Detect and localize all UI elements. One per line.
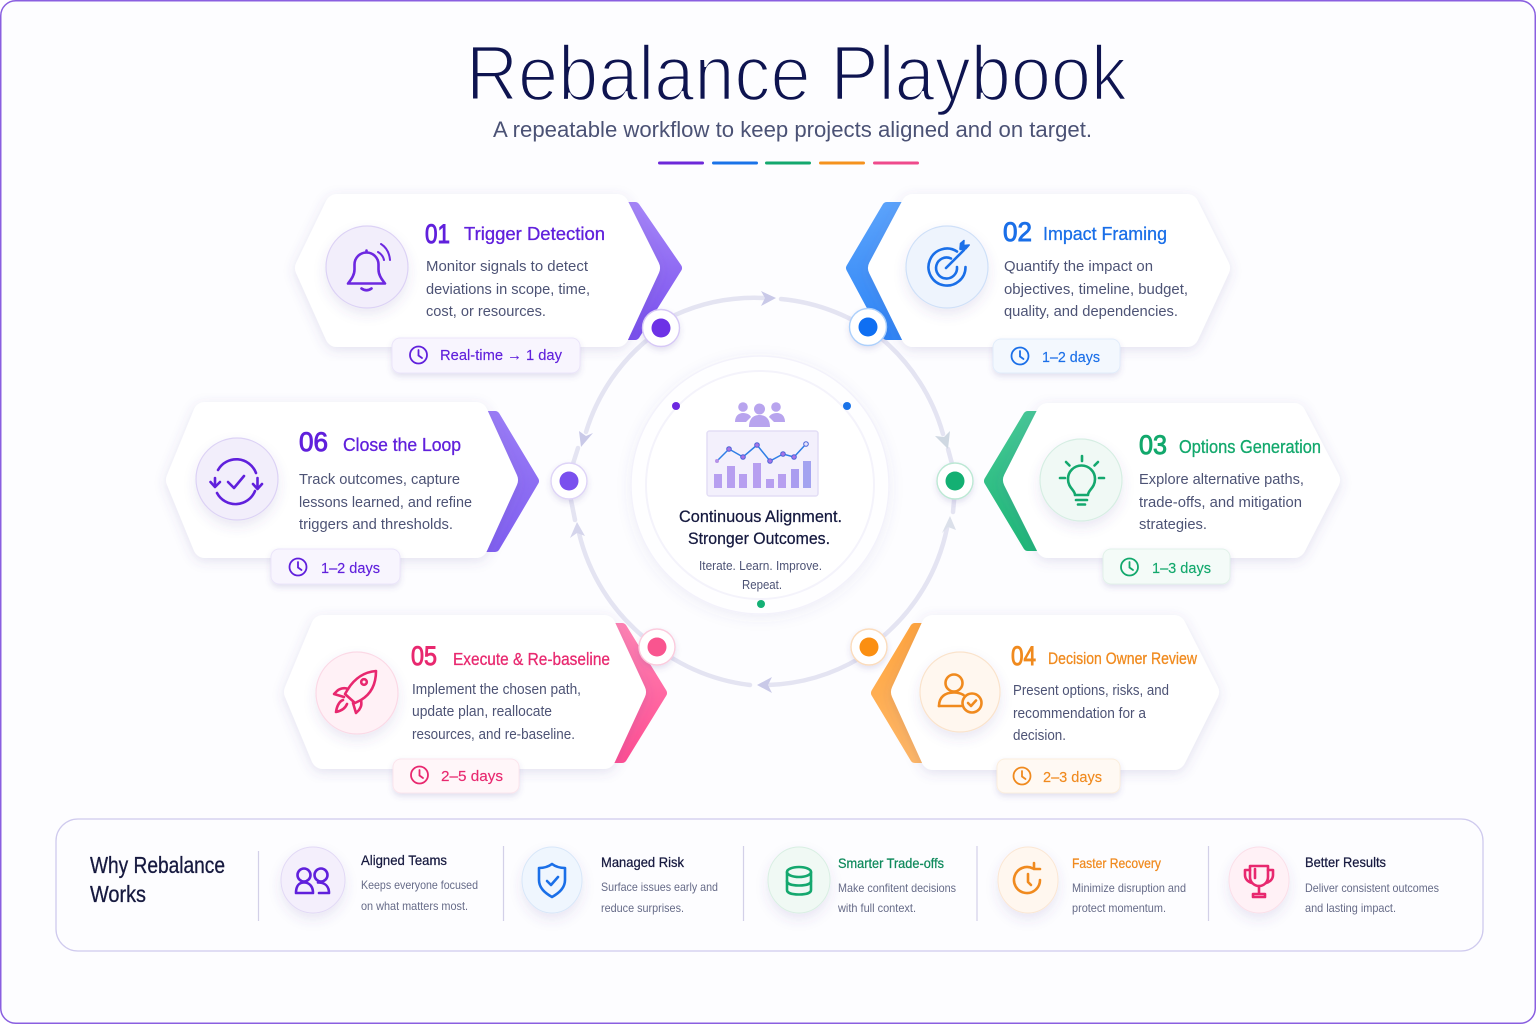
icon: loop check [196, 438, 278, 520]
description: lessons learned, and refine [299, 494, 472, 511]
benefit: managed risk: Surface issues early and [601, 880, 718, 894]
duration badge: 1–2 days [321, 560, 380, 577]
heading: 01 [425, 219, 450, 249]
chevron [876, 628, 935, 758]
description: Explore alternative paths, [1139, 471, 1304, 488]
card [1015, 415, 1328, 546]
heading: Close the Loop [343, 434, 461, 455]
panel heading: Why Rebalance [90, 852, 225, 878]
node markers [551, 308, 973, 665]
icon: light bulb [1040, 439, 1122, 521]
benefit: faster recovery: Faster Recovery [1072, 855, 1161, 871]
benefit: managed risk: reduce surprises. [601, 901, 684, 915]
description [299, 471, 472, 533]
duration badge [993, 339, 1120, 373]
card [903, 627, 1207, 758]
hub dots [672, 402, 851, 608]
benefit: better results: Better Results [1305, 854, 1386, 870]
card [880, 206, 1218, 335]
heading [425, 219, 605, 249]
description: Track outcomes, capture [299, 471, 460, 488]
panel: why rebalance works [56, 819, 1483, 951]
panel heading: Works [90, 881, 146, 907]
heading: Execute & Re-baseline [453, 649, 610, 669]
panel: step 02 [851, 206, 1218, 373]
heading [411, 641, 610, 671]
duration badge [271, 549, 400, 584]
description [426, 258, 590, 320]
heading: Decision Owner Review [1048, 649, 1198, 668]
panel: step 03 [989, 415, 1328, 584]
hub caption: Repeat. [742, 577, 782, 592]
benefit: smarter trade-offs: with full context. [837, 901, 916, 915]
description: quality, and dependencies. [1004, 303, 1178, 320]
heading [299, 427, 461, 457]
description: cost, or resources. [426, 303, 546, 320]
panel: step 06 [178, 414, 534, 584]
benefit: managed risk [522, 847, 718, 915]
heading: 04 [1011, 641, 1036, 671]
chevron [472, 416, 534, 547]
icon: person with check [920, 652, 1000, 732]
description: Monitor signals to detect [426, 258, 589, 275]
chart: dashboard [707, 431, 818, 496]
duration badge [393, 759, 519, 793]
description: Implement the chosen path, [412, 681, 581, 698]
heading: Options Generation [1179, 436, 1321, 457]
title: Rebalance Playbook [466, 29, 1128, 117]
chevron [600, 628, 662, 758]
cycle ring with arrows [569, 291, 956, 693]
benefit: managed risk: Managed Risk [601, 854, 685, 870]
benefit: aligned teams: Aligned Teams [361, 852, 447, 868]
panel heading [90, 852, 225, 907]
description: recommendation for a [1013, 705, 1147, 722]
heading: 05 [411, 641, 437, 671]
heading: 06 [299, 427, 328, 457]
colour accent bars [658, 162, 919, 164]
duration badge [1103, 549, 1230, 584]
benefit: better results: Deliver consistent outcomes [1305, 881, 1439, 895]
hub caption [699, 558, 822, 592]
hub heading: Stronger Outcomes. [688, 530, 830, 548]
description: update plan, reallocate [412, 703, 552, 720]
panel: centre hub [631, 356, 889, 614]
duration badge: 2–5 days [441, 768, 503, 785]
heading [1139, 430, 1321, 460]
heading: Impact Framing [1043, 223, 1167, 244]
description: strategies. [1139, 516, 1207, 533]
benefit: smarter trade-offs: Smarter Trade-offs [838, 855, 944, 871]
benefit: aligned teams: on what matters most. [361, 899, 468, 913]
benefit: aligned teams [281, 847, 478, 913]
heading: Trigger Detection [464, 223, 605, 244]
benefit: faster recovery: protect momentum. [1072, 901, 1166, 915]
hub heading [679, 508, 842, 548]
hub caption: Iterate. Learn. Improve. [699, 558, 822, 573]
description: Present options, risks, and [1013, 682, 1169, 699]
heading: 02 [1003, 217, 1032, 247]
benefit: faster recovery [998, 847, 1186, 915]
benefit: smarter trade-offs [768, 847, 956, 915]
description: decision. [1013, 727, 1066, 744]
subtitle: A repeatable workflow to keep projects aligned and on target. [493, 117, 1092, 142]
duration badge: Real-time → 1 day [440, 347, 562, 364]
heading [1003, 217, 1167, 247]
heading [1011, 641, 1198, 671]
duration badge [997, 759, 1120, 793]
description [1013, 682, 1169, 744]
card [307, 206, 648, 335]
icon: bell [326, 226, 408, 308]
description [1004, 258, 1188, 320]
panel: step 04 [876, 627, 1207, 793]
icon: target [906, 226, 988, 308]
hub heading: Continuous Alignment. [679, 508, 842, 526]
chevron [851, 207, 912, 335]
description: trade-offs, and mitigation [1139, 494, 1302, 511]
benefit: better results [1229, 847, 1439, 915]
description [1139, 471, 1304, 533]
arrowheads [570, 291, 956, 693]
benefit: smarter trade-offs: Make confitent decisions [838, 881, 956, 895]
card [296, 627, 634, 757]
description: triggers and thresholds. [299, 516, 453, 533]
icon: team [735, 402, 785, 427]
description: deviations in scope, time, [426, 281, 590, 298]
chevron [612, 207, 677, 335]
duration badge [392, 338, 580, 373]
description: objectives, timeline, budget, [1004, 281, 1188, 298]
card [178, 414, 506, 546]
duration badge: 1–2 days [1042, 349, 1100, 366]
benefit: faster recovery: Minimize disruption and [1072, 881, 1186, 895]
description: Quantify the impact on [1004, 258, 1153, 275]
duration badge: 2–3 days [1043, 769, 1102, 786]
description [412, 681, 581, 743]
duration badge: 1–3 days [1152, 560, 1211, 577]
description: resources, and re-baseline. [412, 726, 575, 743]
panel: step 01 [307, 206, 677, 373]
panel: step 05 [296, 627, 662, 793]
icon: rocket [316, 652, 398, 734]
benefit: aligned teams: Keeps everyone focused [361, 878, 478, 892]
chevron [989, 416, 1050, 546]
heading: 03 [1139, 430, 1167, 460]
benefit: better results: and lasting impact. [1305, 901, 1396, 915]
